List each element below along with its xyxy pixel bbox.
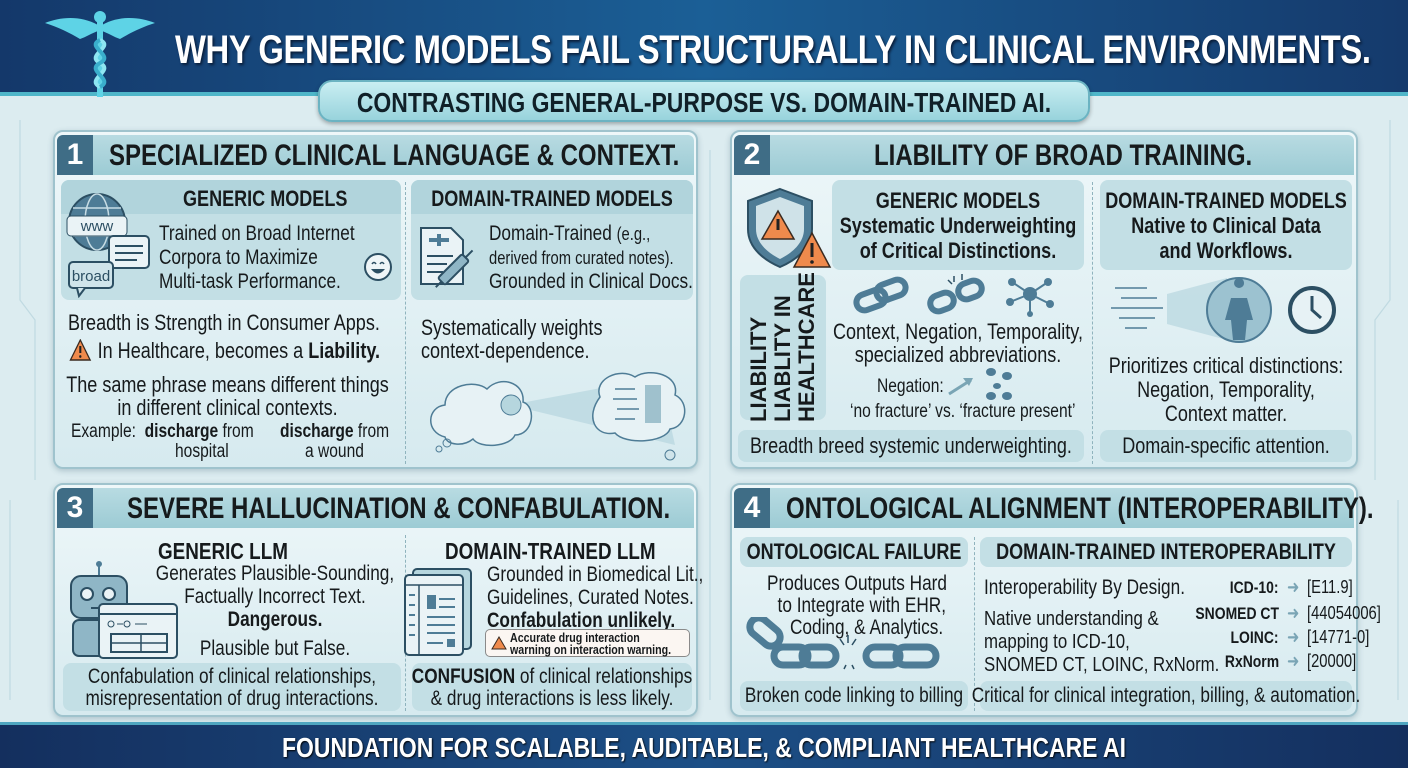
title: WHY GENERIC MODELS FAIL STRUCTURALLY IN CLINICAL ENVIRONMENTS. bbox=[175, 28, 1371, 72]
panel 4: ontological alignment: Produces Outputs Hard bbox=[767, 572, 947, 595]
code mapping list: [20000] bbox=[1307, 651, 1356, 671]
callout: drug interaction warning bbox=[485, 629, 690, 657]
icon: data to body to clock bbox=[1111, 277, 1336, 343]
icon: arrow and scattered dots bbox=[948, 368, 1012, 400]
panel 3: hallucination: Confabulation unlikely. bbox=[487, 609, 675, 632]
icon: smiley bbox=[364, 253, 392, 281]
generic models box: GENERIC MODELS bbox=[183, 186, 347, 211]
panel 1: specialized clinical language: in different clinical contexts. bbox=[117, 395, 338, 420]
generic models box: Multi-task Performance. bbox=[159, 270, 341, 293]
generic lower text: Breadth is Strength in Consumer Apps. bbox=[68, 310, 380, 335]
code mapping list: [44054006] bbox=[1307, 603, 1381, 623]
panel 3: hallucination: Grounded in Biomedical Lit., bbox=[487, 563, 703, 586]
panel 4 header: 4 bbox=[744, 491, 760, 524]
icon: document with syringe bbox=[420, 227, 474, 288]
panel 4: ontological alignment: SNOMED CT, LOINC, RxNorm. bbox=[984, 653, 1219, 676]
panel 2: liability of broad training: specialized abbreviations. bbox=[855, 342, 1061, 367]
code mapping list: ICD-10: bbox=[1230, 578, 1279, 597]
panel 3: hallucination: Guidelines, Curated Notes. bbox=[487, 586, 694, 609]
callout: drug interaction warning: Accurate drug interaction bbox=[510, 630, 640, 645]
generic models box: of Critical Distinctions. bbox=[860, 238, 1056, 263]
bottom note: domain: Domain-specific attention. bbox=[1122, 433, 1330, 458]
bottom note: generic: misrepresentation of drug interactions. bbox=[86, 687, 378, 710]
code mapping list: ➜ bbox=[1287, 603, 1299, 623]
code mapping list: [14771-0] bbox=[1307, 627, 1369, 647]
code mapping list: ➜ bbox=[1287, 651, 1299, 671]
domain-trained models box bbox=[411, 180, 693, 300]
code mapping list: ➜ bbox=[1287, 577, 1299, 597]
generic models box: Trained on Broad Internet bbox=[159, 222, 355, 245]
icon: robot with window bbox=[70, 561, 178, 659]
panel 2: liability of broad training: Negation: bbox=[877, 376, 944, 397]
footer banner bbox=[0, 722, 1408, 768]
domain lower text bbox=[421, 315, 602, 363]
domain-trained models box: DOMAIN-TRAINED MODELS bbox=[431, 186, 673, 211]
domain-trained models box: Native to Clinical Data bbox=[1131, 213, 1321, 238]
bottom note: domain bbox=[1100, 430, 1352, 462]
panel 1: specialized clinical language: The same phrase means different things bbox=[66, 372, 389, 397]
panel 2 header bbox=[734, 135, 1354, 175]
panel 4: ontological alignment: Native understanding & bbox=[984, 607, 1159, 630]
domain-trained interoperability box: DOMAIN-TRAINED INTEROPERABILITY bbox=[996, 539, 1336, 564]
panel 2 header: LIABILITY OF BROAD TRAINING. bbox=[874, 139, 1252, 172]
domain-trained models box bbox=[1100, 180, 1352, 270]
icon: shield with warnings bbox=[747, 188, 832, 268]
panel 1: specialized clinical language: Example: discharge from bbox=[71, 421, 254, 442]
icon: thought clouds bbox=[430, 372, 686, 460]
panel 2: liability of broad training: ‘no fracture’ vs. ‘fracture present’ bbox=[850, 401, 1075, 422]
panel 4: ontological alignment: to Integrate with EHR, bbox=[778, 594, 946, 617]
code mapping list: [E11.9] bbox=[1307, 577, 1353, 597]
code mapping list bbox=[1195, 577, 1381, 671]
vertical label: liability in healthcare: HEALTHCARE bbox=[794, 272, 819, 422]
icon: broken chain bbox=[746, 617, 940, 670]
panel 4: ontological alignment: Interoperability By Design. bbox=[984, 576, 1185, 599]
panel 3: hallucination: Dangerous. bbox=[228, 608, 322, 631]
panel 2: liability of broad training: Negation, Temporality, bbox=[1137, 377, 1315, 402]
bottom note: generic bbox=[63, 663, 401, 711]
panel 2: liability of broad training: Prioritizes critical distinctions: bbox=[1109, 353, 1343, 378]
bottom note: generic: Breadth breed systemic underweighting. bbox=[750, 433, 1072, 458]
domain-trained models box: Grounded in Clinical Docs. bbox=[489, 270, 693, 293]
subtitle pill: CONTRASTING GENERAL-PURPOSE VS. DOMAIN-TRAINED AI. bbox=[357, 87, 1051, 118]
domain lower text: context-dependence. bbox=[421, 338, 590, 363]
vertical label: liability in healthcare: LIABLITY IN bbox=[770, 295, 795, 422]
callout: drug interaction warning: warning on interaction warning. bbox=[510, 642, 671, 657]
panel 3: hallucination: DOMAIN-TRAINED LLM bbox=[445, 538, 656, 564]
generic models box: Corpora to Maximize bbox=[159, 246, 318, 269]
panel 4: ontological alignment: mapping to ICD-10, bbox=[984, 630, 1130, 653]
panel 3 header: SEVERE HALLUCINATION & CONFABULATION. bbox=[127, 492, 670, 525]
subtitle pill bbox=[318, 80, 1090, 122]
dashed divider bbox=[405, 182, 406, 464]
code mapping list: SNOMED CT bbox=[1195, 604, 1279, 623]
panel 2 header: 2 bbox=[744, 138, 760, 171]
panel 4: ontological alignment bbox=[730, 483, 1358, 717]
panel 4: ontological alignment: Coding, & Analytics. bbox=[790, 616, 943, 639]
panel 1: specialized clinical language: discharge from bbox=[280, 421, 389, 442]
generic models box: GENERIC MODELS bbox=[876, 188, 1040, 213]
generic models box bbox=[832, 180, 1084, 270]
domain-trained models box: DOMAIN-TRAINED MODELS bbox=[1105, 188, 1347, 213]
panel 3: hallucination: Generates Plausible-Sounding, bbox=[156, 562, 394, 585]
icon: globe and chat bubbles bbox=[66, 193, 150, 298]
panel 1 header: 1 bbox=[67, 138, 83, 171]
domain-trained models box: Domain-Trained (e.g., bbox=[489, 222, 650, 245]
panel 4 header: ONTOLOGICAL ALIGNMENT (INTEROPERABILITY). bbox=[786, 492, 1374, 525]
bottom note: generic: Confabulation of clinical relationships, bbox=[88, 665, 376, 688]
panel 3: hallucination: Plausible but False. bbox=[200, 637, 350, 660]
icon: stacked documents bbox=[404, 568, 472, 656]
panel 2: liability of broad training: Context, Negation, Temporality, bbox=[833, 319, 1083, 344]
warning line: In Healthcare, becomes a Liability. bbox=[98, 338, 380, 363]
bottom note: failure: Broken code linking to billing bbox=[745, 684, 963, 707]
icon: globe and chat bubbles: www bbox=[80, 218, 113, 235]
code mapping list: RxNorm bbox=[1225, 652, 1279, 671]
generic models box: Systematic Underweighting bbox=[840, 213, 1076, 238]
bottom note: domain bbox=[412, 663, 692, 711]
domain-trained models box: and Workflows. bbox=[1160, 238, 1292, 263]
vertical label: liability in healthcare: LIABILITY bbox=[746, 317, 771, 422]
code mapping list: ➜ bbox=[1287, 627, 1299, 647]
vertical label: liability in healthcare bbox=[740, 275, 826, 420]
ontological failure box: ONTOLOGICAL FAILURE bbox=[747, 539, 961, 564]
panel 1 header: SPECIALIZED CLINICAL LANGUAGE & CONTEXT. bbox=[109, 139, 679, 172]
panel 3: hallucination: Factually Incorrect Text. bbox=[184, 585, 366, 608]
domain lower text: Systematically weights bbox=[421, 315, 602, 340]
panel 1: specialized clinical language: hospital bbox=[175, 441, 229, 462]
panel 3: hallucination bbox=[53, 483, 698, 717]
footer banner: FOUNDATION FOR SCALABLE, AUDITABLE, & COMPLIANT HEALTHCARE AI bbox=[282, 732, 1126, 763]
panel 1: specialized clinical language: a wound bbox=[305, 441, 364, 462]
icon: globe and chat bubbles: broad bbox=[72, 268, 110, 285]
panel 3: hallucination: GENERIC LLM bbox=[158, 538, 288, 564]
bottom note: domain: & drug interactions is less likely. bbox=[431, 687, 673, 710]
bottom note: domain: Critical for clinical integration, billing, & automation. bbox=[972, 684, 1360, 707]
bottom note: domain: CONFUSION of clinical relationships bbox=[412, 665, 692, 688]
panel 3 header: 3 bbox=[67, 491, 83, 524]
panel 2: liability of broad training: Context matter. bbox=[1165, 401, 1287, 426]
icons: chains and network bbox=[853, 274, 1054, 317]
panel 1: specialized clinical language bbox=[53, 130, 698, 469]
code mapping list: LOINC: bbox=[1231, 628, 1279, 647]
icon: caduceus bbox=[45, 11, 155, 97]
panel 2: liability of broad training bbox=[730, 130, 1358, 469]
domain-trained models box: derived from curated notes). bbox=[489, 248, 674, 268]
generic models box bbox=[61, 180, 401, 300]
